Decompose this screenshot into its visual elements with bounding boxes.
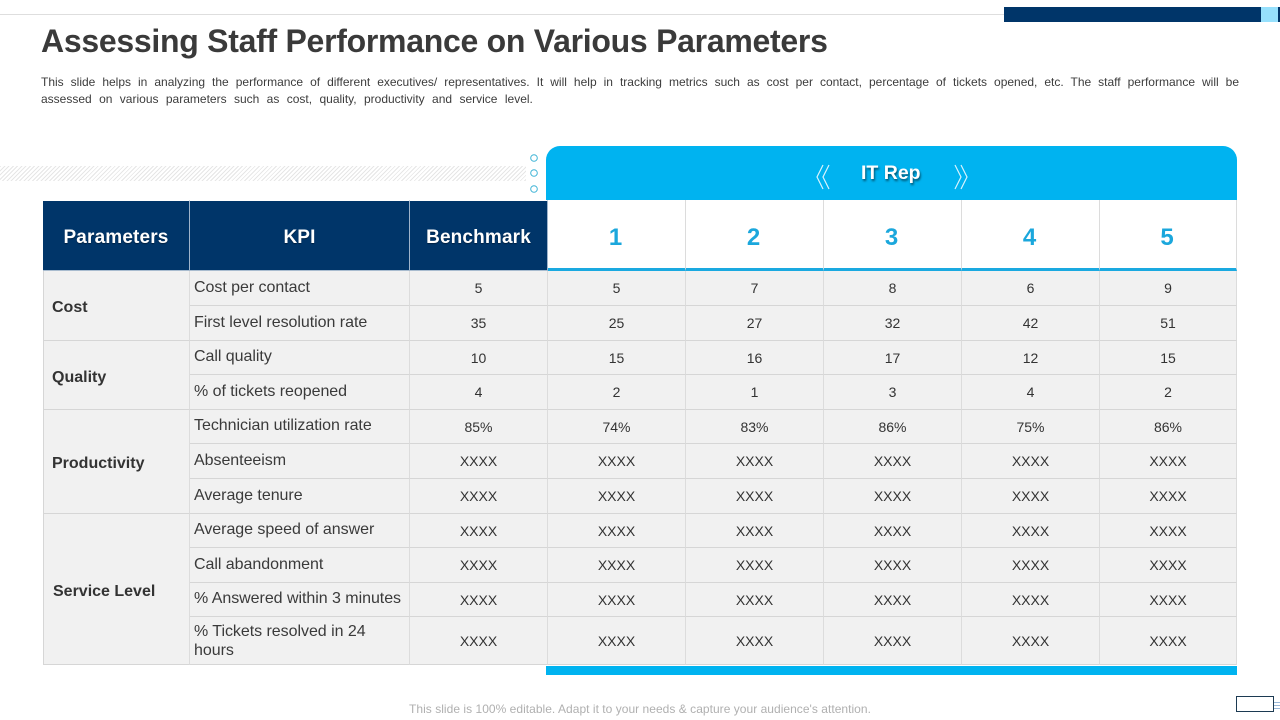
performance table: 4	[1027, 384, 1034, 400]
performance table: 86%	[1154, 418, 1182, 434]
performance table: % Answered within 3 minutes	[194, 590, 401, 607]
performance table: 4	[1023, 224, 1036, 250]
performance table: XXXX	[460, 592, 497, 608]
performance table: XXXX	[1149, 557, 1187, 573]
accent: light blue block	[1261, 7, 1278, 22]
performance table: XXXX	[598, 557, 635, 573]
performance table: XXXX	[1149, 488, 1187, 504]
performance table: 6	[1027, 280, 1034, 296]
icon: three small circles	[530, 154, 538, 193]
performance table: XXXX	[1012, 453, 1049, 469]
performance table: Call quality	[194, 348, 272, 365]
performance table: XXXX	[460, 488, 497, 504]
performance table: XXXX	[736, 632, 773, 648]
bottom blue bar	[546, 666, 1237, 675]
top-right accent bar	[1004, 7, 1280, 22]
icon: left double chevron	[816, 164, 830, 190]
performance table: 27	[747, 315, 762, 331]
performance table: 51	[1160, 315, 1176, 331]
top rule	[0, 14, 1004, 15]
performance table: XXXX	[598, 453, 635, 469]
performance table: XXXX	[874, 453, 911, 469]
performance table: XXXX	[460, 557, 497, 573]
performance table: XXXX	[736, 557, 773, 573]
icon: right double chevron	[954, 164, 968, 190]
performance table: XXXX	[1012, 632, 1049, 648]
performance table	[43, 200, 1237, 665]
performance table: XXXX	[874, 488, 911, 504]
performance table: XXXX	[736, 488, 773, 504]
decorative hatched band	[0, 166, 526, 181]
performance table: 7	[751, 280, 758, 296]
performance table: 1	[751, 384, 758, 400]
performance table: KPI	[283, 226, 316, 248]
performance table: XXXX	[736, 522, 773, 538]
panel: IT Rep header	[546, 146, 1237, 200]
performance table: Average tenure	[194, 486, 303, 504]
performance table: 2	[1164, 384, 1172, 400]
performance table: XXXX	[598, 522, 635, 538]
performance table: 2	[613, 384, 620, 400]
description text	[41, 75, 1239, 106]
performance table: 5	[613, 280, 620, 296]
performance table: XXXX	[1012, 488, 1049, 504]
performance table: 25	[609, 315, 624, 331]
performance table: 3	[889, 384, 896, 400]
performance table: XXXX	[1149, 453, 1187, 469]
performance table: 4	[475, 384, 482, 400]
title: Assessing Staff Performance on Various Parameters	[41, 23, 828, 59]
performance table: Benchmark	[426, 226, 531, 248]
performance table: 35	[471, 315, 486, 331]
performance table: Average speed of answer	[194, 521, 374, 538]
performance table: 32	[885, 315, 900, 331]
performance table: 86%	[878, 418, 907, 434]
IT Rep label: IT Rep	[861, 162, 921, 184]
performance table: Productivity	[52, 455, 144, 472]
performance table: 10	[471, 350, 486, 366]
performance table: Cost per contact	[194, 278, 310, 296]
performance table: XXXX	[460, 453, 497, 469]
performance table: 5	[475, 280, 482, 296]
performance table: 5	[1160, 224, 1174, 250]
performance table: XXXX	[1149, 522, 1187, 538]
performance table: 15	[1160, 350, 1176, 366]
performance table: XXXX	[1149, 592, 1187, 608]
performance table: % Tickets resolved in 24 hours	[194, 622, 366, 658]
navigation box	[1236, 696, 1274, 712]
performance table: XXXX	[460, 522, 497, 538]
performance table: XXXX	[1012, 522, 1049, 538]
performance table: % of tickets reopened	[194, 382, 347, 400]
performance table: 75%	[1016, 418, 1045, 434]
performance table: XXXX	[874, 522, 911, 538]
performance table: 16	[747, 350, 762, 366]
performance table: Cost	[52, 299, 88, 316]
performance table: 85%	[464, 418, 493, 434]
performance table: 3	[885, 224, 898, 250]
performance table: 1	[609, 224, 622, 250]
performance table: 83%	[740, 418, 769, 434]
description text: This slide helps in analyzing the performance of different executives/ representatives. It will help in tracking metrics such as cost per contact, percentage of tickets opened, etc. The staff performance will be	[41, 75, 1239, 89]
performance table: XXXX	[1012, 592, 1049, 608]
performance table: 74%	[602, 418, 631, 434]
performance table: XXXX	[874, 592, 911, 608]
performance table: Quality	[52, 368, 106, 386]
performance table: Service Level	[53, 582, 155, 600]
performance table: XXXX	[460, 632, 497, 648]
performance table: XXXX	[874, 632, 911, 648]
icon: menu lines	[1274, 702, 1280, 709]
performance table: First level resolution rate	[194, 314, 367, 330]
performance table: Technician utilization rate	[194, 417, 372, 434]
performance table: XXXX	[736, 453, 773, 469]
performance table: 15	[609, 350, 624, 366]
performance table: 2	[747, 224, 760, 250]
performance table: XXXX	[598, 488, 635, 504]
performance table: XXXX	[598, 632, 635, 648]
performance table: Call abandonment	[194, 556, 323, 572]
performance table: XXXX	[1012, 557, 1049, 573]
performance table: XXXX	[736, 592, 773, 608]
footer note: This slide is 100% editable. Adapt it to your needs & capture your audience's attention.	[409, 702, 871, 716]
performance table: Parameters	[63, 226, 169, 248]
performance table: 42	[1023, 315, 1038, 331]
performance table: XXXX	[598, 592, 635, 608]
performance table: 12	[1023, 350, 1038, 366]
description text: assessed on various parameters such as cost, quality, productivity and service level.	[41, 92, 533, 106]
performance table: 8	[889, 280, 896, 296]
performance table: Absenteeism	[194, 452, 286, 468]
performance table: XXXX	[1149, 632, 1187, 648]
performance table: XXXX	[874, 557, 911, 573]
performance table: 9	[1164, 280, 1172, 296]
performance table: 17	[885, 350, 900, 366]
